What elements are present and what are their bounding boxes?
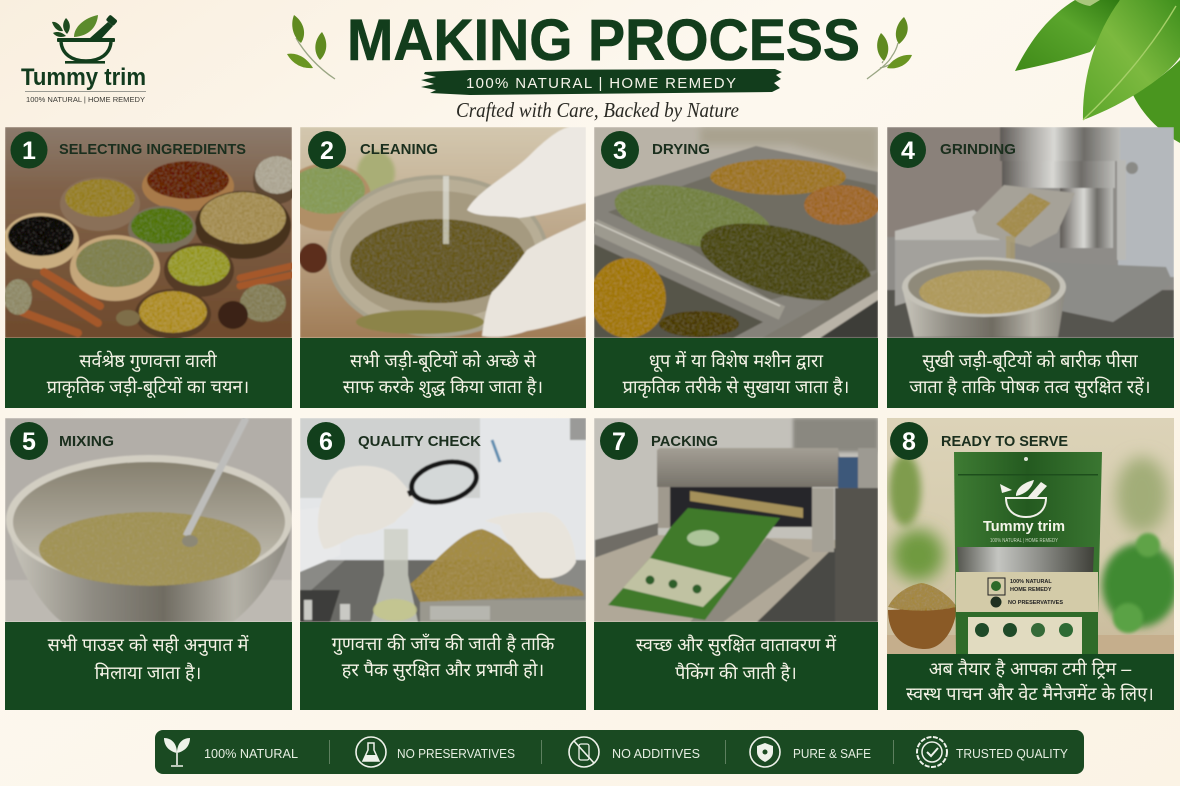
- photo: glass bowl of seeds with gloved hands: [283, 127, 586, 338]
- logo: Tummy trim: [21, 14, 146, 104]
- step 2 badge: 2: [320, 137, 334, 165]
- panel 4: grinding: [887, 127, 1174, 408]
- panel 5: mixing: [5, 418, 292, 710]
- panel 1: selecting ingredients: [3, 127, 301, 408]
- photo: steel mixing bowl: [5, 418, 292, 622]
- step 8 caption: अब तैयार है आपका टमी ट्रिम –: [929, 658, 1131, 679]
- badge: no preservatives: [356, 737, 515, 767]
- badge: pure and safe: [750, 737, 871, 767]
- step 1 heading: SELECTING INGREDIENTS: [59, 141, 246, 158]
- photo: spice bowls: [3, 127, 301, 339]
- badge: no additives: NO ADDITIVES: [612, 747, 700, 761]
- step 7 badge: 7: [612, 428, 626, 456]
- step 8 caption: [887, 654, 1174, 710]
- pouch logo: Tummy trim: [983, 518, 1065, 535]
- step 1 badge: [10, 132, 48, 168]
- ribbon subtitle: [421, 69, 782, 95]
- step 4 badge: [890, 132, 926, 168]
- photo: product pouch and powder bowl: HOME REMEDY: [1010, 587, 1052, 593]
- step 4 caption: जाता है ताकि पोषक तत्व सुरक्षित रहें।: [909, 376, 1151, 399]
- step 5 caption: सभी पाउडर को सही अनुपात में: [48, 634, 250, 657]
- step 8 badge: 8: [902, 428, 916, 456]
- badge: trusted quality: [917, 737, 1069, 767]
- step 8 caption: स्वस्थ पाचन और वेट मैनेजमेंट के लिए।: [906, 683, 1154, 704]
- brand name: Tummy trim: [21, 64, 146, 91]
- badge: 100% natural: 100% NATURAL: [204, 747, 298, 761]
- step 3 caption: प्राकृतिक तरीके से सुखाया जाता है।: [623, 376, 849, 399]
- step 3 caption: [594, 338, 878, 408]
- step 5 heading: MIXING: [59, 433, 114, 450]
- step 6 badge: [307, 422, 345, 460]
- panel 7: packing: [594, 418, 878, 710]
- step 5 caption: [5, 622, 292, 710]
- badge: trusted quality: TRUSTED QUALITY: [956, 747, 1069, 761]
- decorative leaves top right: [1015, 0, 1180, 143]
- badge: pure and safe: PURE & SAFE: [793, 747, 871, 761]
- step 6 heading: QUALITY CHECK: [358, 433, 481, 450]
- step 4 heading: GRINDING: [940, 141, 1016, 158]
- panel 6: quality check: [300, 418, 586, 710]
- step 7 caption: पैकिंग की जाती है।: [675, 662, 797, 683]
- step 1 caption: [5, 338, 292, 408]
- pouch logo: [983, 480, 1065, 544]
- step 7 badge: [600, 422, 638, 460]
- panel 8: ready to serve: [887, 418, 1178, 710]
- ribbon subtitle: 100% NATURAL | HOME REMEDY: [466, 75, 736, 92]
- step 6 caption: गुणवत्ता की जाँच की जाती है ताकि: [332, 633, 555, 656]
- step 7 caption: [594, 622, 878, 710]
- step 2 caption: सभी जड़ी-बूटियों को अच्छे से: [350, 350, 537, 373]
- badge: no preservatives: NO PRESERVATIVES: [397, 747, 515, 761]
- step 5 caption: मिलाया जाता है।: [95, 662, 201, 683]
- step 4 caption: [887, 338, 1174, 408]
- step 2 caption: साफ करके शुद्ध किया जाता है।: [343, 376, 543, 399]
- icon: right leaf sprig: [867, 17, 912, 79]
- step 3 caption: धूप में या विशेष मशीन द्वारा: [649, 350, 823, 373]
- step 7 caption: स्वच्छ और सुरक्षित वातावरण में: [636, 634, 837, 657]
- step 7 heading: PACKING: [651, 433, 718, 450]
- step 2 caption: [300, 338, 586, 408]
- panel 3: drying: [590, 127, 880, 408]
- bottom trust bar: [155, 730, 1084, 774]
- badge: no additives: [569, 737, 700, 767]
- step 1 badge: 1: [22, 137, 36, 165]
- step 2 heading: CLEANING: [360, 141, 438, 158]
- step 1 caption: सर्वश्रेष्ठ गुणवत्ता वाली: [79, 350, 217, 373]
- step 4 badge: 4: [901, 137, 915, 165]
- photo: product pouch and powder bowl: [887, 418, 1178, 656]
- step 5 badge: [10, 422, 48, 460]
- step 8 heading: READY TO SERVE: [941, 433, 1068, 450]
- tagline: Crafted with Care, Backed by Nature: [456, 98, 739, 122]
- icon: left leaf sprig: [287, 15, 335, 79]
- photo: product pouch and powder bowl: NO PRESERVATIVES: [1008, 600, 1063, 606]
- photo: drying trays: [590, 127, 880, 338]
- step 6 caption: हर पैक सुरक्षित और प्रभावी हो।: [342, 659, 544, 682]
- step 8 badge: [890, 422, 928, 460]
- panel 2: cleaning: [283, 127, 586, 408]
- pouch logo: 100% NATURAL | HOME REMEDY: [990, 538, 1059, 544]
- logo strapline: 100% NATURAL | HOME REMEDY: [26, 95, 145, 104]
- icon: mortar and pestle with leaves: [52, 14, 118, 64]
- photo: packing machine and pouch: [594, 418, 878, 622]
- step 3 badge: 3: [613, 137, 627, 165]
- step 4 caption: सुखी जड़ी-बूटियों को बारीक पीसा: [922, 350, 1138, 373]
- step 6 caption: [300, 622, 586, 710]
- title: MAKING PROCESS: [347, 8, 860, 73]
- step 2 badge: [308, 131, 346, 169]
- step 5 badge: 5: [22, 428, 36, 456]
- photo: product pouch and powder bowl: 100% NATURAL: [1010, 579, 1052, 585]
- step 3 heading: DRYING: [652, 141, 710, 158]
- badge: 100% natural: [164, 738, 298, 766]
- photo: gloved hands with magnifier: [300, 418, 586, 622]
- step 6 badge: 6: [319, 428, 333, 456]
- photo: grinding machine: [887, 127, 1174, 338]
- step 1 caption: प्राकृतिक जड़ी-बूटियों का चयन।: [47, 376, 249, 399]
- step 3 badge: [601, 131, 639, 169]
